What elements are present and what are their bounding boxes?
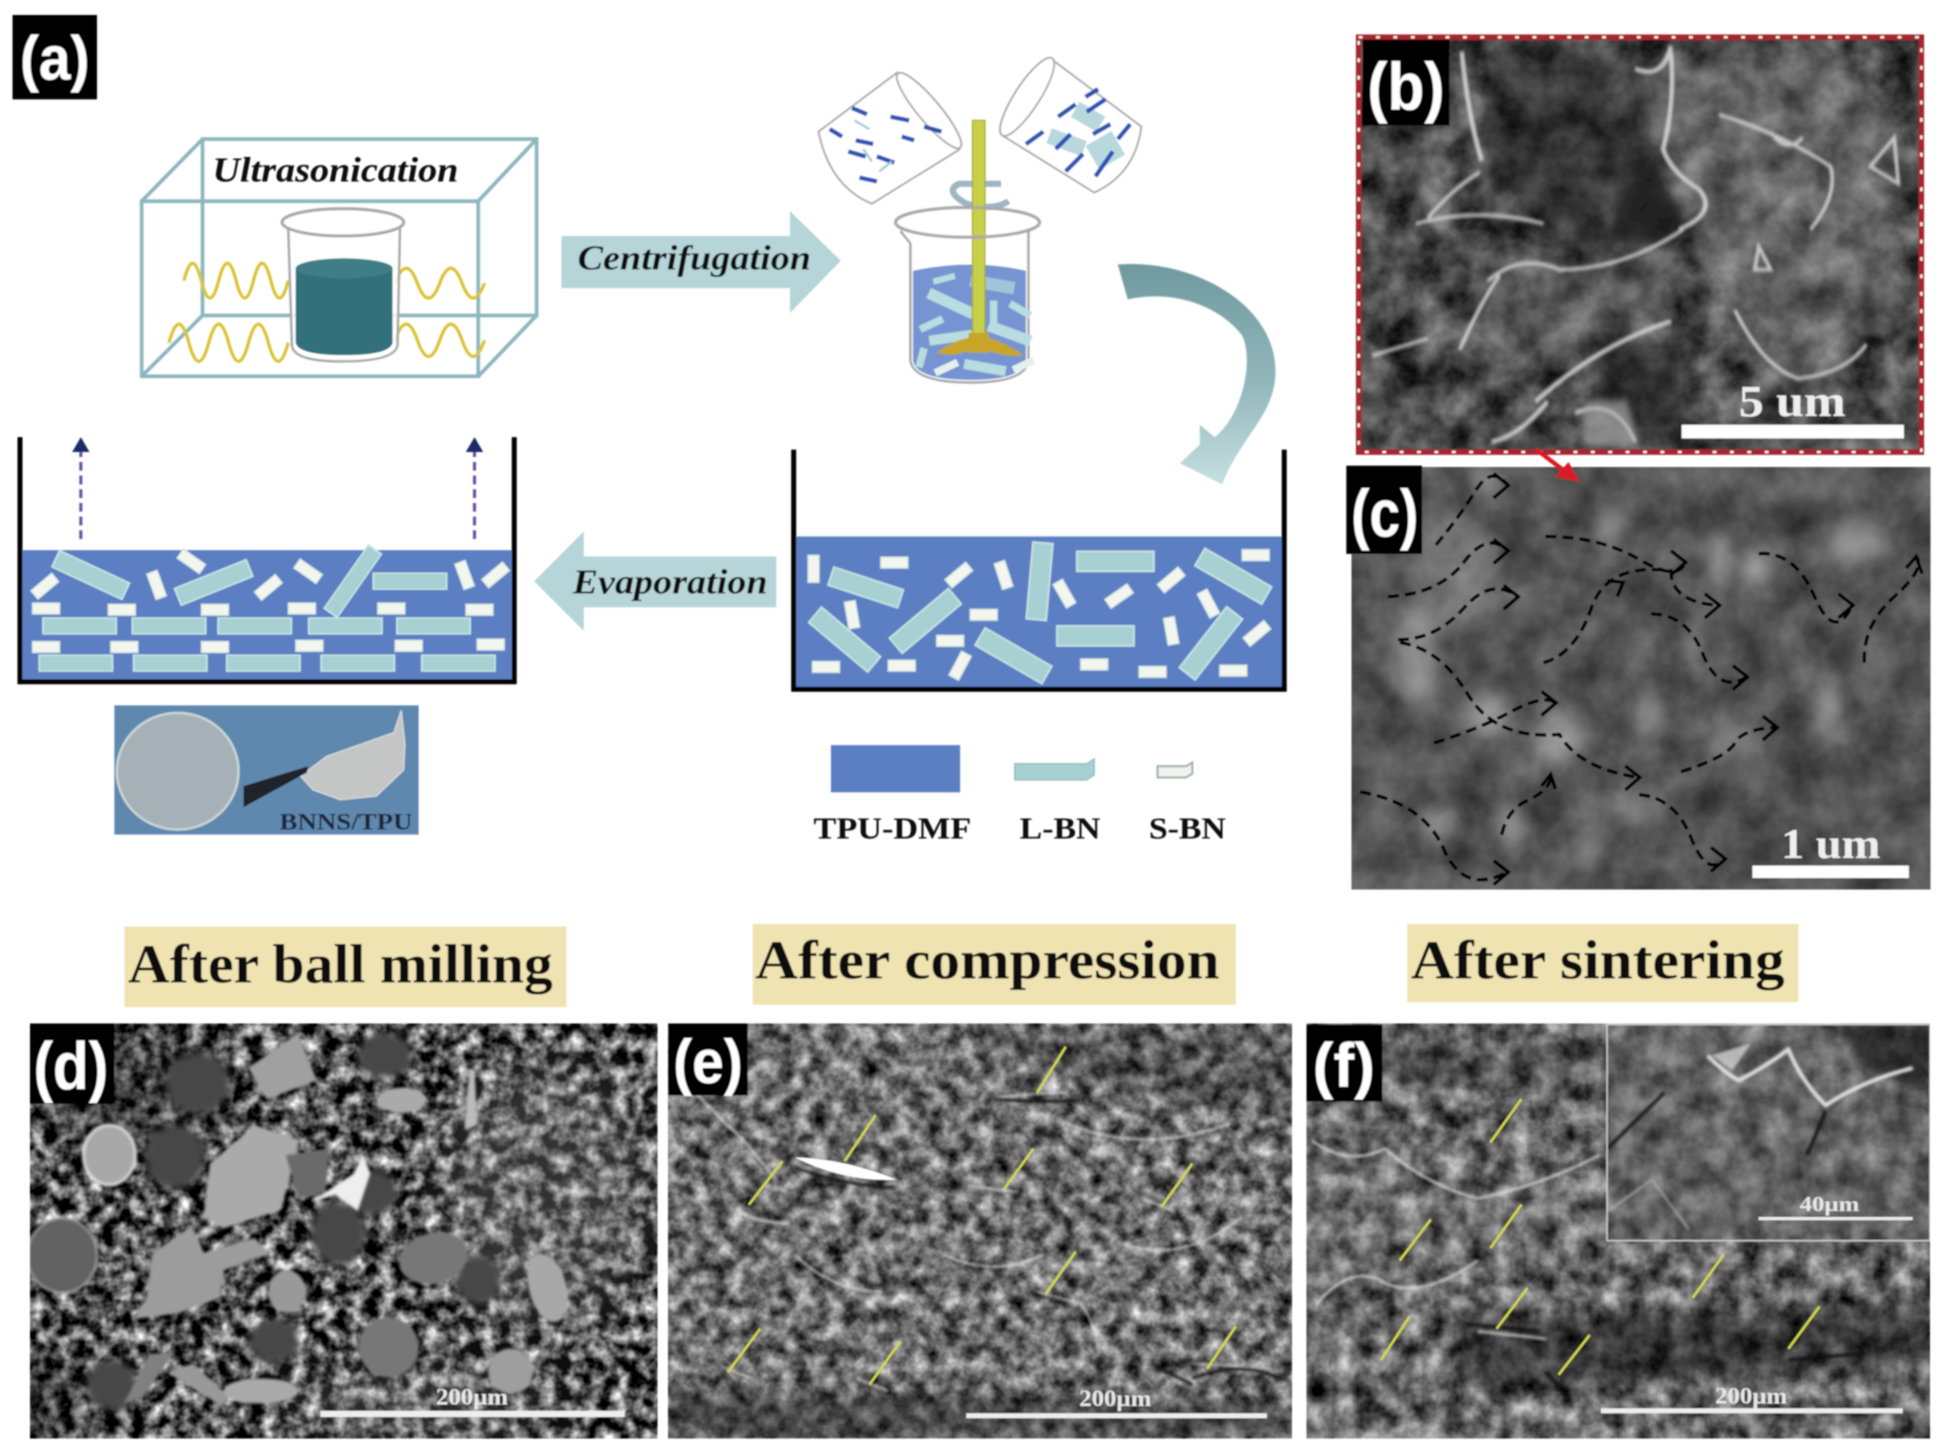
scale bar 5 um bbox=[1682, 376, 1904, 438]
tank right with dispersed flakes bbox=[794, 450, 1284, 689]
fracture surface detail bbox=[668, 1031, 1292, 1438]
flakes in beaker bbox=[915, 273, 1035, 376]
panel: (b) SEM image bbox=[1359, 37, 1921, 452]
scale bar 200 um f bbox=[1601, 1383, 1903, 1413]
liquid bbox=[913, 265, 1026, 380]
legend: L-BN bbox=[1015, 759, 1100, 845]
stirred beaker bbox=[896, 120, 1040, 382]
L-BN flakes bbox=[809, 542, 1272, 684]
scale bar 200 um d: 200µm bbox=[436, 1385, 508, 1411]
yellow arrows f bbox=[1381, 1099, 1819, 1375]
S-BN flakes bbox=[808, 550, 1271, 680]
label (d): (d) bbox=[34, 1029, 108, 1104]
curved arrow bbox=[1118, 264, 1276, 484]
heading: After compression bbox=[753, 924, 1236, 1005]
label (f): (f) bbox=[1313, 1032, 1375, 1101]
label (c): (c) bbox=[1351, 476, 1418, 551]
inset image bbox=[1607, 1025, 1930, 1241]
panel: (d) SEM after ball milling bbox=[0, 1023, 658, 1453]
photo: BNNS/TPU film bbox=[114, 705, 419, 836]
stirring rod and blades bbox=[936, 120, 1023, 356]
heading: After ball milling bbox=[124, 926, 566, 1007]
scale bar 40 um inset: 40µm bbox=[1800, 1192, 1860, 1216]
swirl bbox=[953, 184, 1009, 207]
panel: (f) SEM after sintering bbox=[1307, 1023, 1930, 1438]
arrow: Centrifugation: Centrifugation bbox=[578, 238, 811, 277]
scale bar 1 um: 1 um bbox=[1781, 821, 1880, 868]
L-BN flakes bbox=[39, 545, 495, 671]
ultrasonication bath bbox=[142, 139, 537, 376]
dashed electron paths bbox=[1360, 473, 1922, 885]
S-BN flakes bbox=[31, 549, 510, 653]
SEM bright patches c bbox=[1360, 468, 1922, 885]
heading: After ball milling: After ball milling bbox=[128, 933, 553, 994]
arrow: Evaporation bbox=[534, 532, 776, 631]
legend bbox=[814, 745, 1226, 845]
scale bar 200 um e bbox=[966, 1386, 1267, 1418]
rim bbox=[896, 207, 1040, 237]
beaker body bbox=[900, 231, 1028, 382]
scale bar 1 um bbox=[1752, 821, 1909, 878]
beaker with teal liquid bbox=[282, 209, 404, 361]
ultrasonic waves bbox=[169, 263, 484, 361]
legend: S-BN bbox=[1149, 763, 1226, 845]
evaporation arrow left bbox=[72, 437, 90, 539]
flakes and particles bbox=[0, 1031, 658, 1453]
title: Ultrasonication: Ultrasonication bbox=[212, 150, 458, 189]
label (e): (e) bbox=[673, 1028, 743, 1097]
scale bar 200 um e: 200µm bbox=[1079, 1386, 1152, 1412]
label (b): (b) bbox=[1367, 49, 1444, 124]
yellow arrows e bbox=[728, 1047, 1236, 1385]
evaporation arrow right bbox=[466, 437, 483, 539]
tank left with aligned flakes bbox=[20, 437, 514, 682]
label (a): (a) bbox=[20, 24, 90, 93]
scale bar 200 um d bbox=[321, 1385, 625, 1417]
heading: After sintering: After sintering bbox=[1411, 930, 1785, 991]
fracture surface detail bbox=[1307, 1025, 1930, 1401]
legend: S-BN: S-BN bbox=[1149, 810, 1226, 845]
legend: L-BN: L-BN bbox=[1020, 810, 1100, 845]
arrow: Evaporation: Evaporation bbox=[572, 563, 768, 602]
pouring beaker left bbox=[819, 66, 969, 204]
scale bar 40 um inset bbox=[1759, 1192, 1913, 1220]
photo label: BNNS/TPU bbox=[280, 810, 412, 836]
legend: TPU-DMF bbox=[814, 745, 971, 845]
heading: After sintering bbox=[1407, 924, 1798, 1002]
heading: After compression: After compression bbox=[755, 930, 1220, 991]
panel: (c) SEM image bbox=[1346, 466, 1930, 889]
dashed red border bbox=[1359, 37, 1921, 452]
scale bar 5 um: 5 um bbox=[1739, 376, 1846, 426]
arrow: Centrifugation bbox=[561, 211, 841, 313]
legend: TPU-DMF: TPU-DMF bbox=[814, 810, 971, 845]
scale bar 200 um f: 200µm bbox=[1715, 1383, 1788, 1409]
red arrow from b to c bbox=[1536, 450, 1580, 482]
SEM tonal structure b bbox=[1372, 46, 1902, 448]
panel: (e) SEM after compression bbox=[668, 1023, 1292, 1438]
pouring beaker right bbox=[992, 52, 1141, 192]
